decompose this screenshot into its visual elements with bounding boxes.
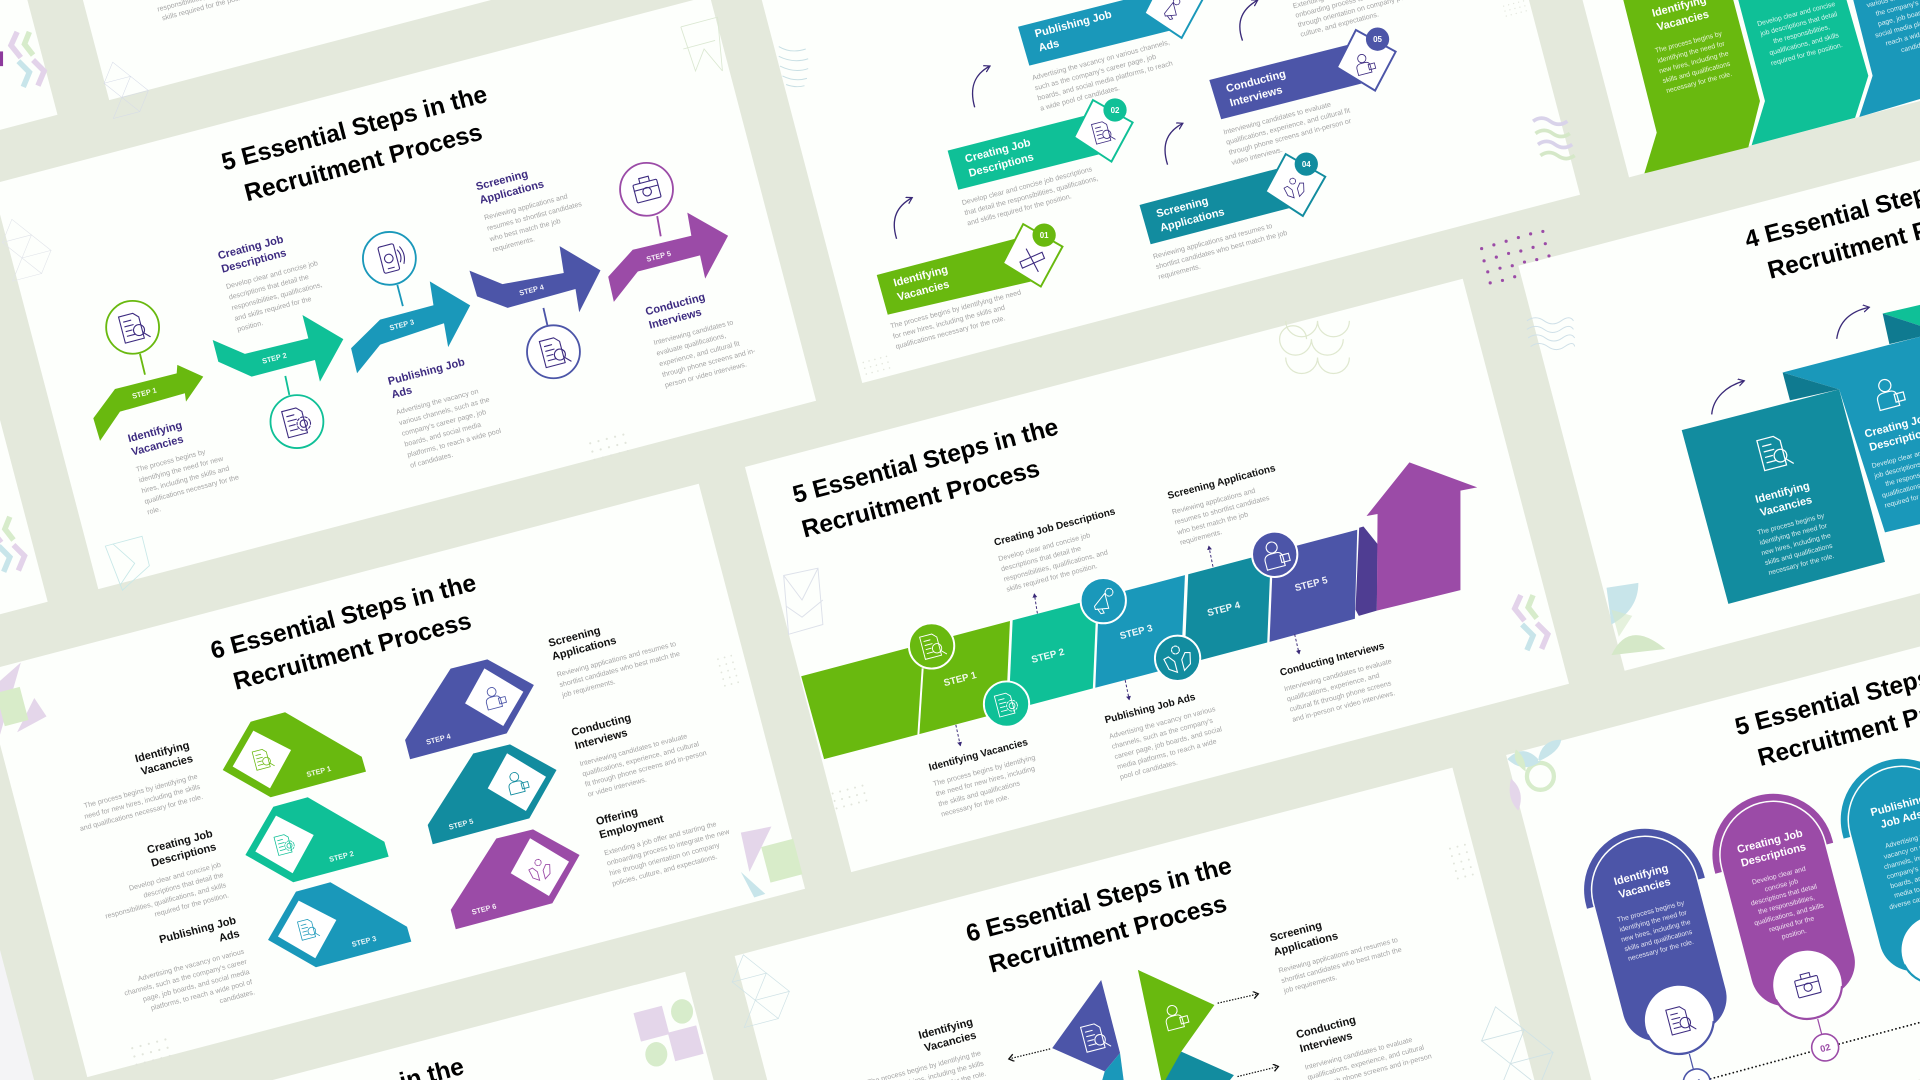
polygon step 5: STEP 5 (448, 817, 474, 832)
panel: 6 steps polygon slide (0, 484, 805, 1077)
text: publishing job ads: Advertising the vacancy on (395, 387, 479, 417)
text: conducting interviews: experience, and cultural fit (658, 340, 741, 368)
step labels (131, 249, 672, 401)
ribbon body text: Interviewing candidates to evaluate (1223, 101, 1332, 136)
ribbon body text (889, 0, 1437, 351)
pill 2 body: descriptions that detail (1750, 883, 1818, 908)
text: offering employment: policies, culture, and expectations. (611, 853, 718, 888)
ribbon body text: culture, and expectations. (1299, 10, 1380, 39)
ribbon body text: Reviewing applications and resumes to (1152, 222, 1273, 261)
title: 5 Essential Steps in the (219, 81, 490, 176)
text: screening applications (1268, 901, 1405, 995)
panel: 5 essential steps pill slide (1506, 567, 1920, 1080)
icon circle 1 (909, 623, 954, 669)
text: conducting interviews: Interviews (574, 727, 629, 752)
ribbon headings: Applications (1159, 206, 1226, 234)
ribbon 01 (877, 223, 1062, 315)
big arrow (1367, 462, 1477, 611)
text: conducting interviews (570, 696, 710, 799)
text: creating job descriptions: descriptions that detail the (143, 871, 224, 900)
text: publishing job ads: media platforms, to reach a wide (1116, 737, 1217, 771)
text: identifying vacancies: and qualifications necessary for the role. (79, 793, 204, 833)
text: publishing job ads: company's career page, job (401, 408, 487, 438)
text: identifying vacancies: identifying the need for (1759, 522, 1829, 547)
text: identifying vacancies: The process begins by (135, 448, 207, 474)
text: offering employment: Offering (595, 806, 639, 828)
dotted arrows (1009, 994, 1278, 1077)
step labels: STEP 5 (645, 249, 672, 264)
polygon step 6 (451, 829, 580, 929)
text: mint chevron body: Develop clear and concise (1757, 1, 1836, 28)
text: identifying vacancies: role. (146, 505, 162, 516)
title: 5 Essential Steps in the (790, 414, 1061, 509)
text: identifying vacancies: new hires, including the (1761, 532, 1832, 557)
pill 1 body: new hires, including the (1620, 919, 1692, 944)
icon circle step 2 (270, 376, 323, 448)
text: screening applications: Reviewing applications and resumes to (1278, 936, 1399, 975)
text: screening applications: Applications (478, 178, 545, 207)
text: creating job descriptions: skills required for the position. (1006, 562, 1098, 594)
pill 2 number (1805, 1016, 1842, 1064)
text: screening applications: requirements. (492, 235, 536, 254)
text: publishing job ads: channels, such as the company's career (124, 958, 248, 998)
text: conducting interviews: Interviewing candidates to evaluate (1283, 657, 1393, 693)
ribbon 02: 02 (1111, 106, 1120, 115)
panel: far left partial slides (0, 0, 57, 1080)
step band 4 (1184, 552, 1271, 664)
text: publishing job ads: platforms, to reach a wide pool of (150, 978, 253, 1012)
text: publishing job ads: boards, and social media (404, 421, 482, 449)
title: Recruitment Process (231, 607, 474, 696)
text: screening applications: resumes to shortlist candidates (486, 200, 583, 233)
pill 1 icon circle (1637, 978, 1721, 1062)
text: identifying vacancies (1746, 478, 1837, 577)
icon circle 2 (984, 681, 1029, 727)
pill 1 body: identifying the need for (1619, 909, 1688, 934)
icon circle step 4 (527, 308, 580, 378)
text: offering employment: Extending a job offer and starting the (603, 820, 717, 857)
text: creating job descriptions: position. (236, 319, 264, 334)
text: conducting interviews: Conducting (1295, 1014, 1357, 1041)
white divider under step 1 circle (918, 668, 923, 735)
ribbon headings: Vacancies (896, 279, 951, 304)
ribbon 02 (948, 98, 1133, 190)
ribbon body text: qualifications, experience, and cultural fit (1225, 106, 1351, 147)
ribbon body text: Advertising the vacancy on various channels, (1031, 38, 1171, 82)
pill 1 (1575, 819, 1755, 1080)
step labels: STEP 4 (518, 282, 546, 298)
icon circle 5 (1252, 532, 1297, 577)
text: publishing job ads: Publishing Job Ads (1104, 692, 1197, 726)
text: conducting interviews: or video interviews. (587, 776, 648, 799)
panel: 5 essential steps, arrow ribbons (0, 0, 816, 589)
text: identifying vacancies: The process begins by (1757, 512, 1826, 537)
text: mint chevron body: required for the position. (1770, 42, 1844, 67)
triangle green (1138, 970, 1214, 1080)
text: screening applications (546, 607, 683, 700)
arrow step 4 (469, 246, 600, 312)
text: identifying vacancies: the need for new hires, including (935, 765, 1036, 798)
text: screening applications: shortlist candidates who best match the (559, 650, 681, 689)
text: identifying vacancies: identifying the need for new (138, 455, 225, 484)
text: screening applications (1166, 463, 1289, 547)
step band 5 (1270, 530, 1357, 642)
text: conducting interviews: Conducting (570, 712, 632, 739)
step band 1 (801, 621, 1010, 759)
text: conducting interviews: evaluate qualifications, (656, 332, 727, 358)
text: screening applications: Screening (475, 168, 529, 193)
text: creating job descriptions: descriptions that detail the (1000, 545, 1082, 573)
icon document (1081, 1021, 1111, 1052)
polygon step 3: STEP 3 (351, 934, 377, 949)
ribbon headings: Screening (1155, 195, 1210, 220)
pill 2 body: concise job (1764, 878, 1799, 894)
step labels: STEP 1 (131, 386, 158, 401)
text: creating job descriptions: Creating Job (146, 828, 214, 857)
pill 1 heading: Vacancies (1617, 876, 1672, 901)
text: offering employment: Employment (598, 813, 665, 841)
text: mint chevron body: the responsibilities, (1773, 24, 1831, 45)
ribbon 05 (1209, 28, 1396, 119)
pill 1 heading: Identifying (1613, 862, 1670, 888)
ribbon headings (892, 9, 1291, 304)
text: screening applications: Applications (551, 635, 618, 663)
pill 1 number (1676, 1051, 1713, 1080)
ribbon body text: requirements. (1158, 263, 1202, 281)
title: Recruitment Process (986, 890, 1230, 979)
polygon step 4 (405, 659, 534, 759)
text: identifying vacancies: the skills and qualifications (938, 779, 1021, 808)
panel: 6 steps triangles slide (735, 768, 1559, 1080)
polygon step 6: STEP 6 (471, 902, 497, 917)
text: offering employment: hire through orientation on company (609, 841, 721, 878)
text: conducting interviews: Interviews (1299, 1030, 1354, 1055)
triangle blue (1096, 1053, 1127, 1080)
text: conducting interviews: qualifications, experience, and cultural (581, 740, 700, 778)
text: conducting interviews (644, 282, 760, 390)
text: conducting interviews: fit through phone screens and in-person (584, 749, 708, 789)
text: conducting interviews: Conducting Interviews (1279, 641, 1386, 679)
teal panel (1682, 389, 1885, 604)
dark fold (1783, 372, 1839, 400)
panel: chevron slide (1523, 0, 1920, 177)
ribbon body text: Develop clear and concise job descriptions (961, 165, 1093, 207)
text: identifying vacancies: Vacancies (1759, 494, 1813, 519)
text: conducting interviews: qualifications, experience, and (1286, 671, 1380, 703)
text: creating job descriptions (993, 506, 1129, 594)
text: publishing job ads: candidates. (219, 988, 256, 1005)
text: publishing job ads: Ads (218, 928, 241, 945)
text: screening applications: job requirements. (560, 678, 616, 700)
title: 6 Essential Steps in the (963, 852, 1235, 948)
text: creating job descriptions: Creating Job Descriptions (993, 506, 1117, 549)
ribbon headings: Descriptions (967, 151, 1035, 180)
ribbon body text: a wide pool of candidates. (1039, 84, 1121, 113)
pill 2 (1703, 784, 1883, 1075)
text: screening applications: Applications (1272, 930, 1339, 959)
top fold pieces (1883, 305, 1920, 344)
arrow step 1 (93, 365, 203, 441)
ribbon 04: 04 (1302, 160, 1311, 169)
text: screening applications: who best match the job (488, 217, 562, 244)
text: identifying vacancies (65, 739, 204, 833)
ribbon body text: boards, and social media platforms, to reach (1037, 59, 1174, 103)
text: creating job descriptions: Descriptions (220, 247, 288, 276)
text: publishing job ads: of candidates. (409, 451, 454, 470)
chevron blue (1853, 0, 1920, 117)
panel: 4 essential steps slide (1518, 77, 1920, 671)
pill 2 heading: Descriptions (1740, 841, 1807, 870)
text: publishing job ads: Ads (390, 384, 413, 401)
text: identifying vacancies: necessary for the role. (1666, 71, 1733, 95)
step labels: STEP 4 (1206, 600, 1242, 619)
pill 1 body: The process begins by (1617, 900, 1686, 924)
text: screening applications: Screening (1269, 919, 1323, 945)
text: creating job descriptions: responsibilities, qualifications, and skills (104, 881, 227, 921)
ribbon headings: Interviews (1229, 84, 1284, 109)
ribbon headings: Identifying (892, 264, 949, 289)
panel: ribbon tags slide (756, 0, 1580, 383)
text: identifying vacancies: Identifying Vacancies (928, 737, 1030, 774)
ribbon body text: video interviews. (1231, 146, 1283, 167)
dotted timeline (1711, 1022, 1920, 1079)
icon circle 4 (1155, 636, 1200, 681)
text: screening applications (474, 157, 589, 254)
icon on teal (1757, 433, 1793, 471)
ribbon 01: 01 (1040, 231, 1049, 240)
text: publishing job ads (387, 352, 505, 470)
triangle indigo (1052, 980, 1120, 1071)
text: conducting interviews: Conducting (644, 291, 706, 318)
text: publishing job ads: channels, such as the company's (1111, 717, 1214, 751)
polygon step 2: STEP 2 (328, 849, 355, 864)
text: screening applications: resumes to shortlist candidates (1174, 494, 1271, 526)
text: identifying vacancies: skills and qualifications (1662, 61, 1732, 85)
panel: top partial slide (3, 0, 827, 100)
text: identifying vacancies: hires, including the skills and (141, 464, 230, 495)
text: publishing job ads: Advertising the vacancy on various (137, 947, 246, 983)
step labels (943, 575, 1329, 689)
pill 2 body: Develop clear and (1751, 866, 1807, 886)
text: screening applications: Reviewing applications and (483, 192, 569, 222)
text: creating job descriptions: and skills required for the (234, 295, 312, 323)
text: screening applications: Reviewing applications and (1171, 487, 1256, 516)
blue panel (1783, 337, 1920, 532)
polygon step 2 (245, 797, 389, 882)
step labels: STEP 2 (261, 351, 288, 366)
text: identifying vacancies: necessary for the role. (940, 793, 1010, 819)
icon circle 3 (1081, 578, 1126, 623)
ribbon body text: for new hires, including the skills and (892, 304, 1006, 341)
text: conducting interviews: Interviewing candidates to evaluate (579, 732, 688, 768)
text: publishing job ads: career page, job boards, and social (1114, 725, 1223, 761)
step labels: STEP 5 (1294, 575, 1329, 594)
text: identifying vacancies: Vacancies (1656, 9, 1710, 34)
title: Recruitment Process (242, 119, 485, 207)
step labels: STEP 2 (1030, 647, 1066, 666)
icon people (1162, 1002, 1190, 1031)
text: screening applications: requirements. (1179, 528, 1223, 547)
arrow step 3 (351, 281, 470, 373)
pill 2 body: qualifications, and skills (1754, 902, 1825, 927)
text: conducting interviews: Interviewing candidates to (653, 318, 734, 347)
curved arrows (894, 0, 1258, 239)
text: creating job descriptions: Creating Job (217, 233, 285, 262)
panel: bottom-left partial slide (0, 972, 791, 1080)
text: offering employment (595, 784, 737, 888)
text: creating job descriptions: Develop clear and concise job (128, 861, 222, 893)
panel: center staircase slide (745, 279, 1569, 872)
ribbon 04 (1140, 152, 1325, 244)
text: conducting interviews: and in-person or video interviews. (1291, 689, 1396, 724)
text: identifying vacancies: Identifying (917, 1016, 974, 1042)
text: publishing job ads: pool of candidates. (1119, 759, 1179, 781)
text: creating job descriptions: required for the position. (154, 891, 230, 919)
polygon step 1: STEP 1 (305, 764, 332, 779)
text: identifying vacancies: The process begins by identifying the (83, 773, 198, 810)
text: identifying vacancies: skills and qualifications (1764, 543, 1834, 567)
text: creating job descriptions: descriptions that detail the (228, 273, 310, 302)
text: identifying vacancies: The process begins by identifying (932, 754, 1036, 788)
text: publishing job ads: various channels, such as the (398, 396, 491, 427)
pill 2 body: position. (1781, 928, 1808, 941)
text: mint chevron body: qualifications, and skills (1769, 32, 1840, 57)
ribbon body text: that detail the responsibilities, qualifications, (964, 174, 1099, 217)
text: identifying vacancies: The process begins by (1654, 30, 1723, 55)
text: conducting interviews: Interviewing candidates to evaluate (1304, 1036, 1413, 1072)
text: identifying vacancies: Vacancies (130, 433, 185, 459)
text: creating job descriptions (217, 227, 330, 334)
text: identifying vacancies: necessary for the role. (1768, 553, 1835, 577)
pill 3 icon circle (1894, 908, 1920, 992)
ribbon 05: 05 (1373, 35, 1383, 44)
text: publishing job ads: page, job boards, and social media (142, 968, 250, 1004)
ribbon body text: through phone screens and in-person or (1228, 117, 1353, 157)
step labels: STEP 1 (943, 670, 978, 689)
text: publishing job ads (1104, 687, 1229, 781)
text: identifying vacancies: Vacancies (140, 753, 194, 778)
text: creating job descriptions (90, 828, 230, 931)
chevron green (1623, 0, 1760, 173)
icon circle step 3 (363, 232, 416, 306)
text: mint chevron body: job descriptions that detail (1759, 11, 1839, 38)
step band 2 (1009, 598, 1097, 711)
text: screening applications: job requirements. (1282, 973, 1338, 995)
icon circle step 5 (620, 163, 673, 236)
triangle deep teal (1163, 1052, 1234, 1080)
title: 6 Essential Steps in the (208, 569, 479, 665)
text: publishing job ads: Publishing Job (387, 356, 466, 388)
text: creating job descriptions (1861, 409, 1920, 511)
arrow step 2 (213, 315, 343, 382)
text: conducting interviews (1295, 998, 1435, 1080)
text: identifying vacancies (848, 1016, 988, 1080)
polygon step 1 (223, 712, 366, 797)
text: creating job descriptions: responsibilities, qualifications, and (1003, 548, 1109, 583)
curved arrows (1712, 307, 1869, 414)
ribbon headings: Conducting (1225, 68, 1287, 95)
chevron mint (1738, 0, 1868, 145)
text: conducting interviews: person or video interviews. (664, 360, 748, 390)
text: identifying vacancies (127, 409, 243, 516)
text: screening applications: who best match the job (1175, 510, 1249, 537)
fold (1356, 527, 1378, 616)
ribbon headings: Ads (1037, 38, 1061, 54)
text: identifying vacancies: new hires, including the (1658, 50, 1730, 75)
text: publishing job ads: Publishing Job (158, 914, 238, 946)
text: screening applications: Screening (547, 625, 602, 650)
text: identifying vacancies: need for new hires, including the skills (84, 783, 202, 821)
text: identifying vacancies: Identifying (1754, 480, 1811, 506)
text: identifying vacancies (1643, 0, 1735, 95)
text: offering employment: onboarding process to integrate the new (606, 827, 731, 868)
text: conducting interviews: cultural fit through phone screens (1289, 679, 1393, 714)
text: identifying vacancies: Vacancies (923, 1029, 978, 1055)
step labels: STEP 3 (1119, 623, 1154, 642)
pill 3 (1831, 749, 1920, 998)
text: publishing job ads (112, 914, 256, 1028)
title: Recruitment Process (799, 455, 1043, 543)
ribbon headings: Publishing Job (1034, 9, 1113, 40)
text: conducting interviews: through phone screens and in- (661, 347, 757, 379)
step labels: STEP 3 (388, 317, 415, 332)
text: identifying vacancies: Identifying (134, 740, 191, 765)
arrow step 5 (608, 213, 728, 302)
ribbon body text: qualifications necessary for the role. (895, 314, 1006, 351)
text: identifying vacancies (928, 736, 1044, 819)
icon on blue (1873, 376, 1906, 410)
text: creating job descriptions: Develop clear and concise job (225, 259, 319, 291)
text: publishing job ads: platforms, to reach a wide pool (406, 427, 502, 459)
text: screening applications: Reviewing applications and resumes to (556, 640, 677, 679)
text: screening applications: Screening Applications (1167, 463, 1277, 502)
pill 2 icon circle (1766, 943, 1849, 1027)
text: identifying vacancies: Identifying (127, 419, 184, 445)
text: identifying vacancies: qualifications necessary for the (144, 473, 240, 506)
dashed arrows (956, 546, 1299, 746)
ribbon headings: Creating Job (964, 137, 1032, 166)
polygon step 4: STEP 4 (425, 731, 453, 747)
pill 2 body: the responsibilities, (1758, 894, 1816, 916)
pill 1 body: necessary for the role. (1627, 939, 1695, 963)
ribbon body text: shortlist candidates who best match the job (1155, 229, 1288, 271)
ribbon body text: The process begins by identifying the need (889, 288, 1022, 330)
text: conducting interviews: Interviews (648, 306, 703, 332)
text: screening applications: shortlist candidates who best match the (1280, 946, 1403, 985)
ribbon body text: such as the company's career page, job (1034, 53, 1157, 92)
pill 1 body: skills and qualifications (1624, 929, 1694, 953)
text: creating job descriptions: responsibilities, qualifications, (231, 281, 323, 312)
text: conducting interviews (1279, 640, 1401, 724)
polygon step 3 (268, 882, 411, 967)
pill 2 body: required for the (1768, 915, 1815, 934)
text: creating job descriptions: Descriptions (150, 841, 218, 870)
step band 3 (1095, 575, 1185, 688)
text: creating job descriptions: Develop clear and concise job (998, 531, 1091, 563)
pill 2 heading: Creating Job (1736, 827, 1804, 856)
pill 2 number: 02 (1819, 1042, 1832, 1054)
text: publishing job ads: Advertising the vacancy on various (1108, 705, 1217, 741)
ribbon body text: and skills required for the position. (966, 192, 1072, 227)
ribbon 03 (1018, 0, 1203, 66)
polygon step 5 (428, 744, 557, 844)
icon circle step 1 (106, 301, 159, 375)
text: identifying vacancies: identifying the need for (1657, 40, 1726, 65)
